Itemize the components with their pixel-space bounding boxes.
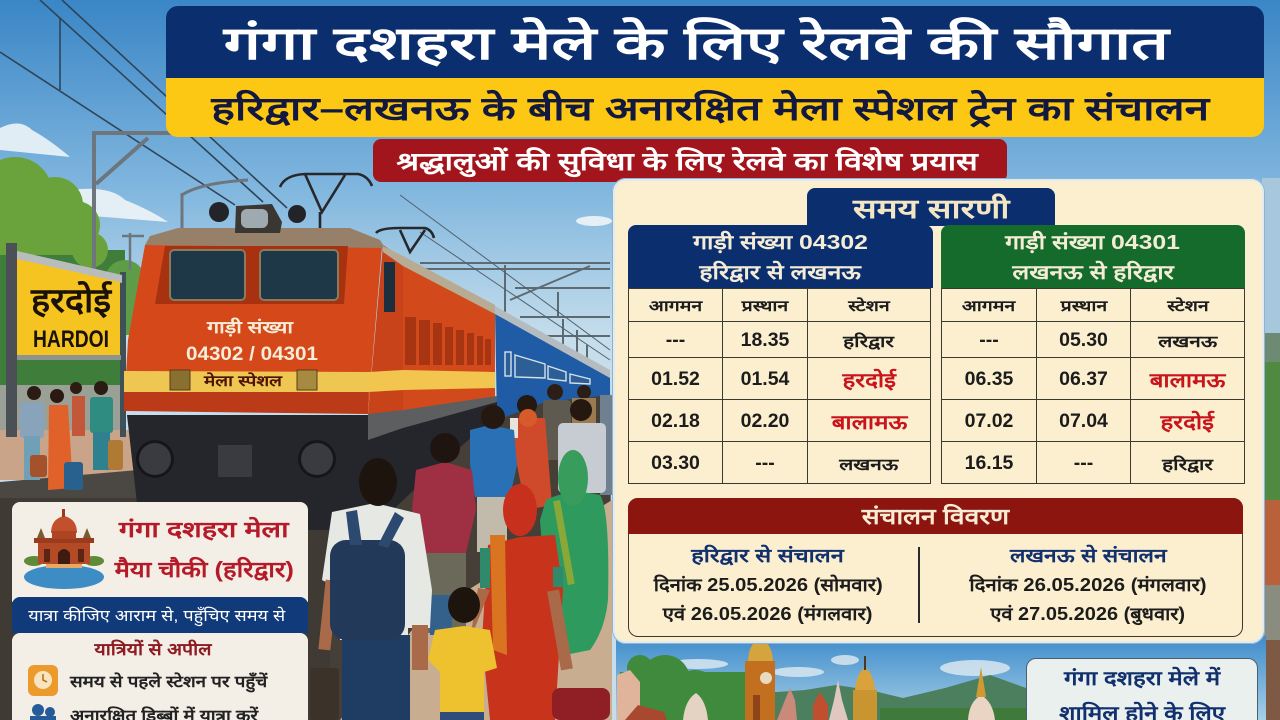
tagline ribbon: श्रद्धालुओं की सुविधा के लिए रेलवे का विशेष प्रयास: [397, 148, 978, 176]
row Lucknow arrival: [628, 441, 723, 484]
row Hardoi station: [807, 357, 931, 400]
table: train 04302: [628, 225, 933, 484]
card: join the fair: गंगा दशहरा मेले में: [1064, 668, 1220, 690]
column: from Lucknow: [969, 544, 1207, 626]
column header station: [807, 288, 931, 322]
headlight and horns: [209, 202, 306, 233]
row Hardoi arrival: 01.52: [651, 368, 700, 390]
row Haridwar station: हरिद्वार: [1162, 456, 1213, 474]
woman in red saree: [470, 484, 610, 720]
heading: appeal: यात्रियों से अपील: [94, 640, 212, 658]
blue coaches: [495, 306, 610, 420]
table header 04301: गाड़ी संख्या 04301: [1006, 232, 1180, 254]
platform ground and track bed: [0, 380, 612, 720]
column: from Haridwar: [653, 544, 882, 624]
train number text on loco: मेला स्पेशल: [203, 372, 283, 390]
column: from Lucknow: एवं 27.05.2026 (बुधवार): [991, 604, 1185, 624]
row Hardoi departure: 01.54: [741, 368, 789, 390]
row Lucknow arrival: ---: [979, 329, 999, 351]
card: join the fair: [1026, 658, 1258, 720]
column header arrival: [941, 288, 1037, 322]
title banner: गंगा दशहरा मेले के लिए रेलवे की सौगात: [223, 17, 1169, 69]
heading: operation details: [628, 498, 1243, 534]
row Haridwar arrival: [628, 321, 723, 358]
man with backpack: [310, 458, 432, 720]
row Hardoi station: हरदोई: [1161, 412, 1214, 434]
heading: operation details: संचालन विवरण: [862, 504, 1009, 529]
row Lucknow station: [807, 441, 931, 484]
column header station: [1130, 288, 1245, 322]
row Lucknow departure: [1036, 321, 1131, 358]
column header departure: प्रस्थान: [742, 298, 788, 315]
row Balamau station: बालामऊ: [831, 412, 907, 434]
heading: timetable: समय सारणी: [853, 194, 1009, 224]
crowd of passengers: [310, 384, 612, 720]
woman in green saree: [540, 450, 608, 655]
column: from Lucknow: दिनांक 26.05.2026 (मंगलवार): [969, 574, 1207, 594]
column: from Haridwar: दिनांक 25.05.2026 (सोमवार): [654, 574, 882, 594]
locomotive: [124, 174, 610, 530]
row Balamau departure: 02.20: [741, 410, 789, 432]
card: Ganga Dussehra fair: [12, 502, 308, 602]
man in maroon shirt: [412, 433, 476, 635]
Haridwar scene: [616, 636, 1266, 720]
row Haridwar departure: ---: [1074, 452, 1093, 474]
slogan band: यात्रा कीजिए आराम से, पहुँचिए समय से: [28, 608, 286, 625]
text: fair name: [114, 516, 294, 582]
column: from Haridwar: एवं 26.05.2026 (मंगलवार): [663, 604, 873, 624]
divider: [918, 547, 920, 623]
column header arrival: आगमन: [649, 298, 702, 315]
row Lucknow departure: 05.30: [1059, 329, 1108, 351]
far crowd: [543, 384, 612, 495]
panel: timetable and operation details: [612, 178, 1265, 644]
table header 04301: [941, 225, 1245, 288]
row Lucknow station: लखनऊ: [839, 456, 898, 474]
station sign: Hardoi: [6, 243, 126, 437]
column header station: स्टेशन: [1167, 298, 1208, 315]
row Haridwar arrival: [941, 441, 1037, 484]
row Balamau departure: 06.37: [1059, 368, 1108, 390]
row Balamau station: बालामऊ: [1150, 370, 1225, 392]
column header departure: [722, 288, 808, 322]
table header 04301: लखनऊ से हरिद्वार: [1012, 262, 1174, 284]
row Haridwar station: हरिद्वार: [844, 334, 894, 350]
row Hardoi arrival: [628, 357, 723, 400]
text: reach early: समय से पहले स्टेशन पर पहुँचें: [70, 674, 267, 691]
row Hardoi arrival: 07.02: [965, 410, 1013, 432]
child in yellow shirt: [428, 587, 497, 720]
card: appeal to passengers: [12, 633, 308, 720]
tagline ribbon: [373, 139, 1007, 182]
woman in orange: [510, 395, 552, 510]
row Hardoi departure: 07.04: [1059, 410, 1108, 432]
text: fair name: मैया चौकी (हरिद्वार): [114, 557, 294, 582]
subtitle banner: हरिद्वार–लखनऊ के बीच अनारक्षित मेला स्पेशल ट्रेन का संचालन: [212, 90, 1209, 127]
icon: passengers: [30, 704, 56, 720]
row Haridwar departure: 18.35: [741, 329, 789, 351]
row Balamau departure: [1036, 357, 1131, 400]
icon: clock: [28, 665, 58, 696]
row Lucknow arrival: 03.30: [651, 452, 700, 474]
row Hardoi departure: [722, 357, 808, 400]
far right scene strip: [1262, 178, 1280, 720]
subtitle banner: [166, 78, 1264, 137]
row Haridwar departure: [722, 321, 808, 358]
column header departure: [1036, 288, 1131, 322]
slogan band: [12, 597, 308, 633]
title banner: [166, 6, 1264, 78]
train number text on loco: गाड़ी संख्या: [206, 317, 294, 337]
row Lucknow arrival: [941, 321, 1037, 358]
column header arrival: आगमन: [962, 298, 1016, 315]
row Lucknow station: [1130, 321, 1245, 358]
row Haridwar station: [807, 321, 931, 358]
column header station: स्टेशन: [848, 298, 890, 315]
icon: temple: [24, 509, 104, 589]
train number text on loco: [186, 317, 318, 390]
panel: operation details: [628, 498, 1243, 637]
row Lucknow departure: [722, 441, 808, 484]
table header 04302: [628, 225, 933, 288]
row Lucknow departure: ---: [755, 452, 775, 474]
row Balamau arrival: [628, 399, 723, 442]
clouds: [0, 123, 612, 226]
row Haridwar departure: [1036, 441, 1131, 484]
trees left: [0, 157, 145, 435]
row Hardoi departure: [1036, 399, 1131, 442]
row Hardoi station: हरदोई: [842, 370, 896, 392]
row Balamau station: [807, 399, 931, 442]
row Balamau arrival: [941, 357, 1037, 400]
passengers on platform: [20, 381, 123, 490]
station sign: Hardoi: HARDOI: [33, 326, 109, 353]
row Balamau station: [1130, 357, 1245, 400]
train number text on loco: 04302 / 04301: [186, 344, 318, 365]
column: from Lucknow: लखनऊ से संचालन: [1010, 546, 1166, 566]
table: train 04301: [941, 225, 1245, 484]
man in blue shirt: [470, 405, 517, 552]
row Balamau arrival: 06.35: [965, 368, 1013, 390]
text: fair name: गंगा दशहरा मेला: [119, 517, 289, 542]
column: from Haridwar: हरिद्वार से संचालन: [692, 546, 844, 566]
table header 04302: हरिद्वार से लखनऊ: [700, 262, 861, 284]
row Balamau departure: [722, 399, 808, 442]
row Haridwar station: [1130, 441, 1245, 484]
heading: timetable: [807, 188, 1055, 226]
station sign: Hardoi: हरदोई: [30, 280, 113, 320]
row Balamau arrival: 02.18: [651, 410, 700, 432]
table header 04302: गाड़ी संख्या 04302: [693, 232, 868, 254]
column header departure: प्रस्थान: [1060, 298, 1107, 315]
row Hardoi arrival: [941, 399, 1037, 442]
man in grey shirt: [558, 399, 606, 493]
overhead wires and masts: [0, 0, 610, 365]
row Lucknow station: लखनऊ: [1158, 334, 1217, 350]
row Hardoi station: [1130, 399, 1245, 442]
column header arrival: [628, 288, 723, 322]
pantographs: [280, 174, 434, 252]
row Haridwar arrival: ---: [666, 329, 685, 351]
row Haridwar arrival: 16.15: [965, 452, 1013, 474]
